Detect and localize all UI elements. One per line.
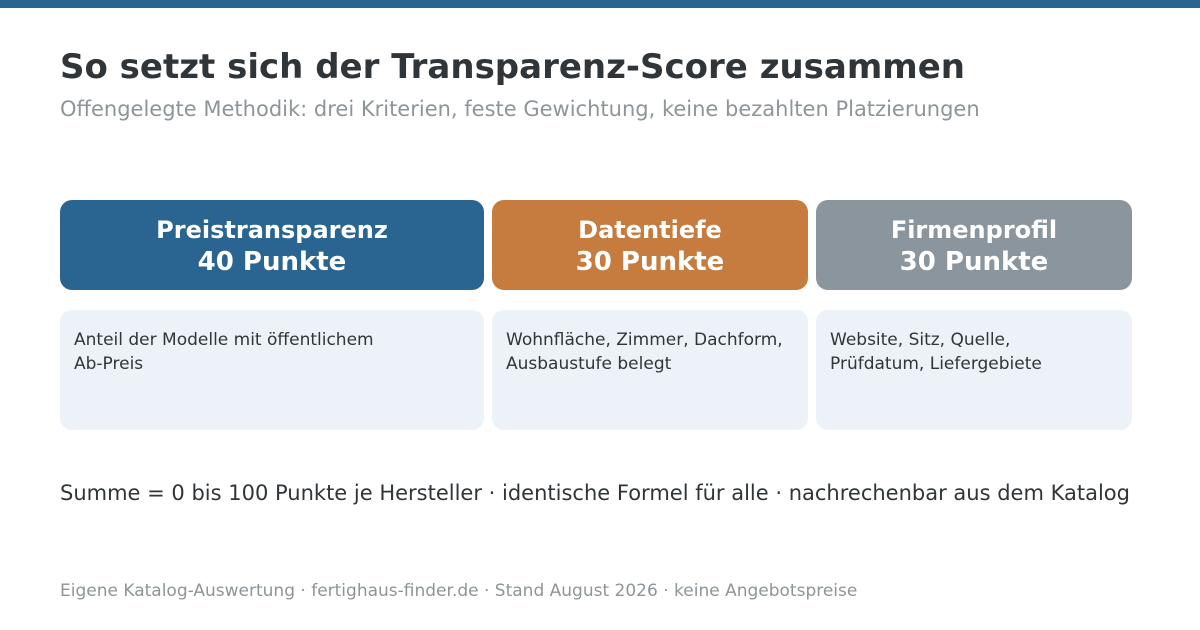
panel: Preistransparenz: 40 Punkte — [198, 247, 346, 277]
panel: Firmenprofil: 30 Punkte — [900, 247, 1048, 277]
description: Firmenprofil: Prüfdatum, Liefergebiete — [830, 354, 1042, 374]
subtitle: Offengelegte Methodik: drei Kriterien, feste Gewichtung, keine bezahlten Platzierungen — [60, 97, 980, 121]
top accent bar — [0, 0, 1200, 8]
description: Datentiefe: Ausbaustufe belegt — [506, 354, 672, 374]
title: So setzt sich der Transparenz-Score zusammen — [60, 47, 965, 87]
description: Preistransparenz: Anteil der Modelle mit öffentlichem — [74, 330, 374, 350]
panel: Firmenprofil — [816, 200, 1132, 290]
description: Preistransparenz: Ab-Preis — [74, 354, 143, 374]
panel: Preistransparenz: Preistransparenz — [156, 216, 388, 244]
description: Datentiefe — [492, 310, 808, 430]
panel: Datentiefe — [492, 200, 808, 290]
summary line: Summe = 0 bis 100 Punkte je Hersteller · identische Formel für alle · nachrechenbar aus dem Katalog — [60, 481, 1130, 505]
panel: Firmenprofil: Firmenprofil — [891, 216, 1057, 244]
description: Datentiefe: Wohnfläche, Zimmer, Dachform, — [506, 330, 783, 350]
panel: Preistransparenz — [60, 200, 484, 290]
description: Firmenprofil: Website, Sitz, Quelle, — [830, 330, 1010, 350]
panel: Datentiefe: 30 Punkte — [576, 247, 724, 277]
description: Preistransparenz — [60, 310, 484, 430]
description: Firmenprofil — [816, 310, 1132, 430]
footer source: Eigene Katalog-Auswertung · fertighaus-finder.de · Stand August 2026 · keine Angebotspreise — [60, 581, 857, 601]
panel: Datentiefe: Datentiefe — [578, 216, 722, 244]
